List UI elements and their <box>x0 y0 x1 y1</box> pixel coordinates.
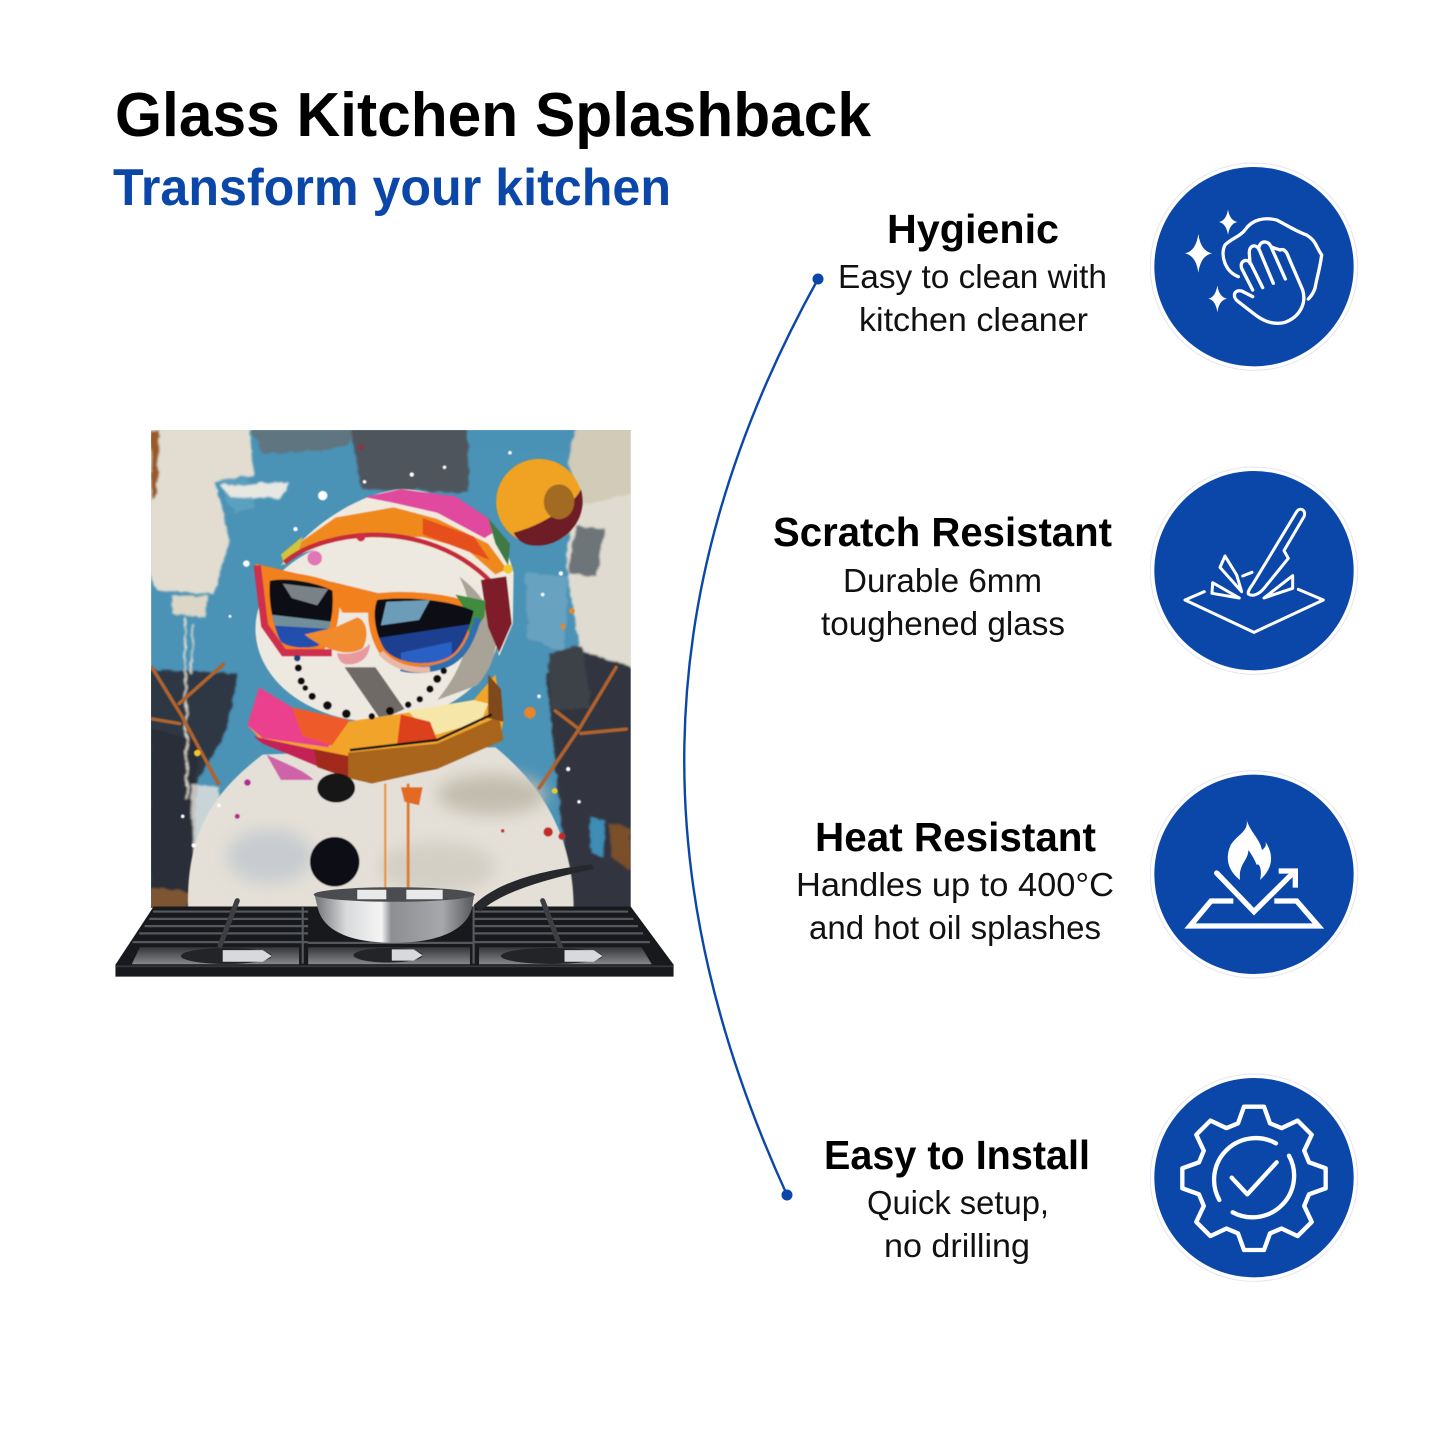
feature text: heat resistant: and hot oil splashes <box>809 909 1101 946</box>
mouth beads <box>294 655 447 720</box>
icon: wiping hand with sparkles <box>1150 163 1358 370</box>
burners <box>181 948 603 964</box>
pompom <box>496 459 583 546</box>
feature text: hygienic: kitchen cleaner <box>859 301 1088 338</box>
woolly hat <box>281 489 514 656</box>
feature text: hygienic: Easy to clean with <box>838 258 1107 295</box>
feature text: hygienic: Hygienic <box>887 206 1059 252</box>
product image: painted splashback above gas hob <box>115 424 674 977</box>
feature text: heat resistant: Handles up to 400°C <box>796 866 1114 903</box>
feature text: easy to install: Easy to Install <box>824 1132 1090 1178</box>
sunglasses <box>255 564 485 670</box>
frying pan <box>314 864 594 943</box>
feature text: scratch resistant: toughened glass <box>821 605 1065 642</box>
title: Glass Kitchen Splashback <box>115 81 871 150</box>
feature text: hygienic <box>838 206 1107 338</box>
icon: gear with check mark <box>1150 1074 1358 1281</box>
icon: knife scratching surface <box>1150 467 1358 674</box>
gas hob <box>115 864 674 977</box>
feature text: scratch resistant <box>773 509 1112 642</box>
feature text: scratch resistant: Scratch Resistant <box>773 509 1112 555</box>
buttons and drips <box>310 773 423 889</box>
snowman body <box>188 747 574 914</box>
snowman head <box>255 536 499 722</box>
background paint blocks <box>146 424 637 911</box>
scarf <box>247 675 503 784</box>
front edge <box>115 965 674 967</box>
feature text: heat resistant: Heat Resistant <box>815 814 1096 860</box>
burner plates <box>132 947 299 964</box>
feature text: scratch resistant: Durable 6mm <box>843 562 1042 599</box>
feature text: easy to install: Quick setup, <box>867 1184 1049 1221</box>
feature text: heat resistant <box>796 814 1114 946</box>
paint splatter <box>181 445 581 848</box>
icon: flame with arrow over surface <box>1150 771 1358 978</box>
feature text: easy to install <box>824 1132 1090 1264</box>
connector curve <box>684 274 824 1200</box>
feature text: easy to install: no drilling <box>884 1227 1030 1264</box>
carrot nose <box>305 617 370 664</box>
painted glass panel: snowman <box>146 424 637 914</box>
hob frame <box>115 906 674 977</box>
twig arms <box>152 664 626 788</box>
grates <box>133 901 650 964</box>
subtitle: Transform your kitchen <box>113 159 671 217</box>
